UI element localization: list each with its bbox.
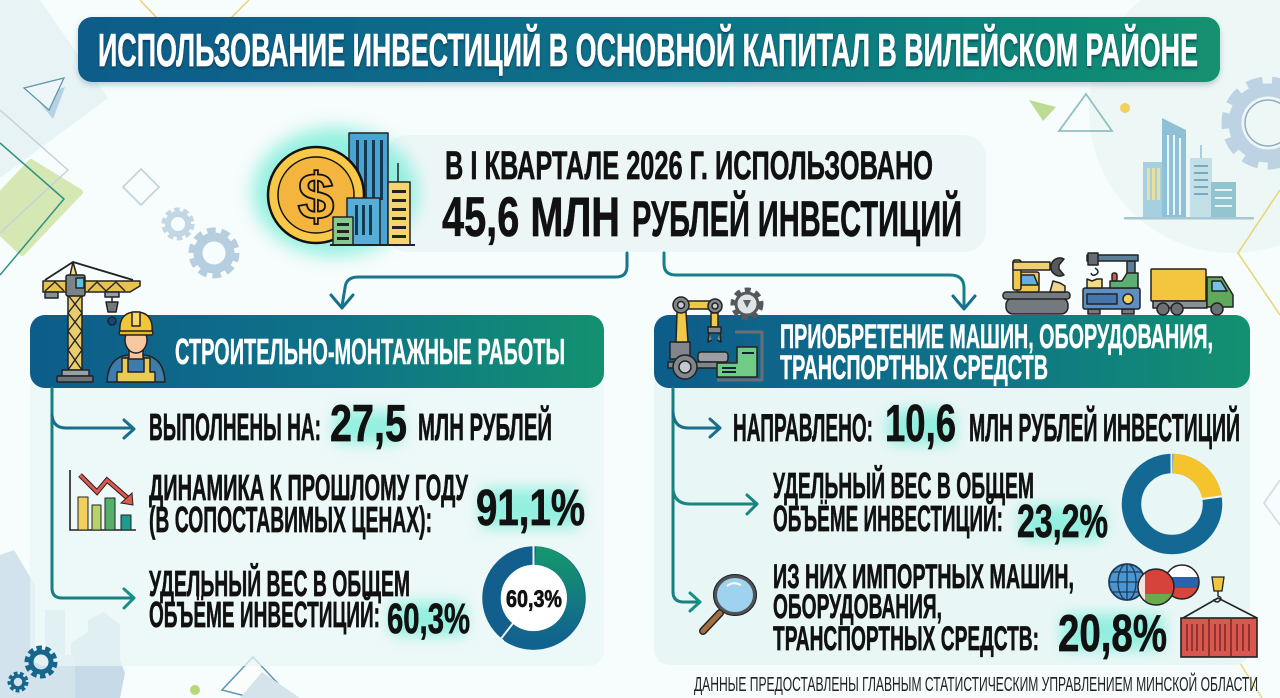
icon: cargo container (1181, 577, 1257, 657)
icon: declining chart (70, 470, 136, 530)
arrow tree: machinery (673, 388, 757, 611)
row: dynamics: (В СОПОСТАВИМЫХ ЦЕНАХ): (149, 499, 432, 540)
arrow: to construction (331, 253, 627, 308)
value 27,5: 27,5 (330, 395, 407, 453)
value 91,1%: 91,1% (476, 479, 585, 536)
row: directed amount: НАПРАВЛЕНО: (733, 407, 873, 450)
arrow: to machinery (664, 253, 975, 309)
row: dynamics (149, 467, 585, 540)
row: completed volume: ВЫПОЛНЕНЫ НА: (149, 407, 321, 449)
icon: robotic arm and machine (668, 291, 762, 380)
total unit: РУБЛЕЙ ИНВЕСТИЦИЙ (632, 190, 962, 247)
row: completed volume (149, 395, 552, 453)
icon: worker (107, 312, 165, 382)
unit: МЛН РУБЛЕЙ (418, 404, 552, 449)
dollar sign: $ (298, 159, 334, 233)
value 23,2%: 23,2% (1017, 495, 1108, 547)
panel: construction works (30, 262, 604, 666)
donut chart: 23,2% (1132, 453, 1224, 544)
arrow tree: construction (52, 388, 134, 608)
row: imported machinery: ИЗ НИХ ИМПОРТНЫХ МАШИН, (773, 558, 1074, 596)
machinery header (654, 315, 1250, 388)
machinery heading line 2: ТРАНСПОРТНЫХ СРЕДСТВ (780, 349, 1048, 387)
row: imported machinery: ОБОРУДОВАНИЯ, (773, 588, 942, 626)
construction header (30, 315, 604, 388)
row: imported machinery: ТРАНСПОРТНЫХ СРЕДСТВ: (773, 620, 1039, 658)
donut label: 60,3% (506, 586, 562, 613)
icon: globe and flags (1109, 564, 1199, 605)
icon: excavator (1003, 258, 1070, 314)
total value: 45,6 МЛН (442, 185, 620, 248)
value 20,8%: 20,8% (1058, 605, 1167, 663)
row: share of investment: ОБЪЁМЕ ИНВЕСТИЦИЙ: (149, 593, 380, 635)
value 60,3%: 60,3% (387, 595, 470, 643)
row: machinery share: ОБЪЁМЕ ИНВЕСТИЦИЙ: (773, 497, 1003, 539)
icon: truck (1151, 269, 1233, 315)
panel: machinery purchase (654, 253, 1257, 665)
row: directed amount (733, 395, 1240, 453)
icon: coin and buildings (253, 128, 417, 256)
total text line 1: В I КВАРТАЛЕ 2026 Г. ИСПОЛЬЗОВАНО (445, 144, 933, 188)
panel: total investment (386, 135, 986, 252)
row: machinery share: УДЕЛЬНЫЙ ВЕС В ОБЩЕМ (773, 464, 1034, 506)
value 10,6: 10,6 (885, 395, 956, 453)
row: dynamics: ДИНАМИКА К ПРОШЛОМУ ГОДУ (149, 467, 468, 508)
icon: machine tool (1083, 253, 1140, 314)
row: share of investment (149, 562, 470, 643)
row: share of investment: УДЕЛЬНЫЙ ВЕС В ОБЩЕМ (149, 562, 410, 604)
icon: magnifier (703, 574, 756, 631)
donut chart: 60,3% (492, 546, 576, 640)
title banner (78, 17, 1220, 82)
icon: crane (43, 262, 140, 382)
row: machinery share (773, 464, 1108, 547)
row: imported machinery (773, 558, 1167, 663)
icon: bottom-left gears (10, 649, 54, 690)
construction heading: СТРОИТЕЛЬНО-МОНТАЖНЫЕ РАБОТЫ (175, 331, 565, 372)
